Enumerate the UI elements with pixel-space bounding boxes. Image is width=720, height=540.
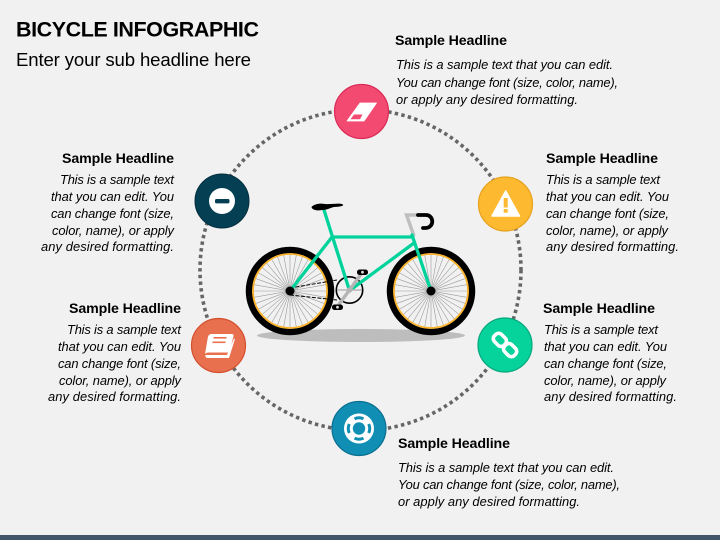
heading: upper right: Sample Headline bbox=[546, 151, 658, 167]
saddle bbox=[312, 204, 343, 210]
handlebar grip bbox=[418, 215, 432, 228]
body: upper right: can change font (size, bbox=[546, 206, 669, 221]
body: top: This is a sample text that you can edit. bbox=[396, 57, 613, 72]
body: upper right: any desired formatting. bbox=[546, 239, 679, 254]
body: lower right bbox=[544, 322, 677, 404]
body: upper right: that you can edit. You bbox=[546, 189, 669, 204]
body: lower right: that you can edit. You bbox=[544, 339, 667, 354]
body: upper left bbox=[41, 172, 176, 254]
body: upper left: can change font (size, bbox=[51, 206, 174, 221]
icon: eraser bbox=[334, 84, 388, 138]
rear wheel bbox=[249, 250, 331, 332]
pedals bbox=[332, 270, 368, 310]
body: bottom bbox=[398, 460, 620, 509]
body: lower left: This is a sample text bbox=[67, 322, 182, 337]
heading: lower right: Sample Headline bbox=[543, 301, 655, 317]
body: lower left: color, name), or apply bbox=[59, 373, 183, 388]
body: top: You can change font (size, color, name), bbox=[396, 75, 618, 90]
body: upper left: color, name), or apply bbox=[52, 223, 176, 238]
icon: minus sign bbox=[195, 174, 249, 228]
body: lower right: any desired formatting. bbox=[544, 389, 677, 404]
subtitle: Enter your sub headline here bbox=[16, 49, 251, 70]
crank hub bbox=[347, 287, 352, 293]
heading: bottom: Sample Headline bbox=[398, 436, 510, 452]
body: lower left: that you can edit. You bbox=[58, 339, 181, 354]
handlebar stem bbox=[406, 215, 419, 236]
body: upper right: color, name), or apply bbox=[546, 223, 670, 238]
body: lower left: any desired formatting. bbox=[48, 389, 181, 404]
dotted ring bbox=[200, 110, 521, 430]
body: upper right bbox=[546, 172, 679, 254]
icon: book bbox=[192, 318, 246, 372]
text block: lower left bbox=[48, 301, 183, 404]
chainring bbox=[336, 277, 363, 303]
chain bbox=[290, 280, 337, 300]
body: bottom: This is a sample text that you can edit. bbox=[398, 460, 614, 475]
title: BICYCLE INFOGRAPHIC bbox=[16, 18, 259, 42]
text block: top bbox=[395, 33, 618, 107]
body: top: or apply any desired formatting. bbox=[396, 92, 578, 107]
body: upper left: This is a sample text bbox=[60, 172, 175, 187]
heading: lower left: Sample Headline bbox=[69, 301, 181, 317]
body: upper left: any desired formatting. bbox=[41, 239, 174, 254]
body: lower left: can change font (size, bbox=[58, 356, 181, 371]
body: lower right: can change font (size, bbox=[544, 356, 667, 371]
icon: warning triangle bbox=[478, 177, 532, 231]
body: bottom: You can change font (size, color, name), bbox=[398, 477, 620, 492]
frame bbox=[290, 210, 431, 291]
body: bottom: or apply any desired formatting. bbox=[398, 494, 580, 509]
body: lower left bbox=[48, 322, 183, 404]
cranks bbox=[337, 273, 362, 307]
ground shadow bbox=[257, 329, 465, 342]
bicycle illustration bbox=[249, 204, 472, 342]
text block: upper right bbox=[546, 151, 679, 254]
icon: life ring bbox=[332, 402, 386, 456]
text block: upper left bbox=[41, 151, 176, 254]
body: upper left: that you can edit. You bbox=[51, 189, 174, 204]
body: lower right: color, name), or apply bbox=[544, 373, 668, 388]
body: lower right: This is a sample text bbox=[544, 322, 659, 337]
heading: top: Sample Headline bbox=[395, 33, 507, 49]
front wheel bbox=[390, 250, 472, 332]
icon: chain link bbox=[478, 318, 532, 372]
body: upper right: This is a sample text bbox=[546, 172, 661, 187]
wheel hubs bbox=[286, 286, 436, 296]
text block: bottom bbox=[398, 436, 620, 509]
text block: lower right bbox=[543, 301, 677, 404]
body: top bbox=[396, 57, 618, 107]
heading: upper left: Sample Headline bbox=[62, 151, 174, 167]
